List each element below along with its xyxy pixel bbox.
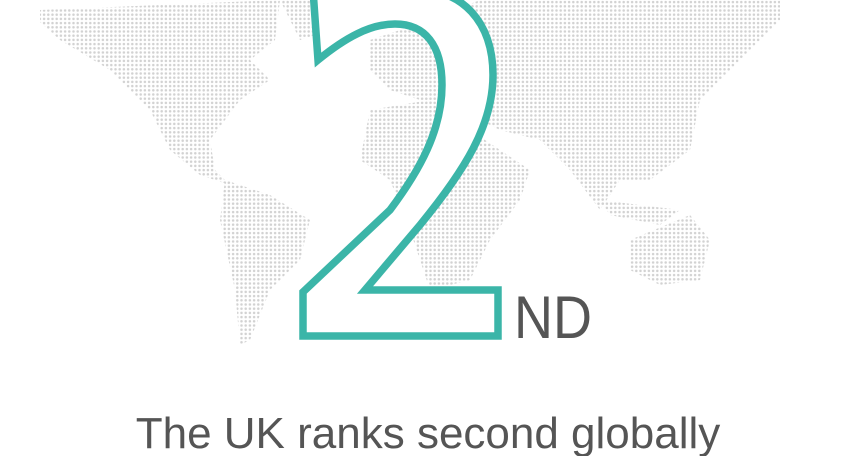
big numeral 2 outline — [303, 0, 498, 336]
ordinal suffix ND: ND — [514, 284, 592, 352]
world map — [40, 0, 780, 345]
